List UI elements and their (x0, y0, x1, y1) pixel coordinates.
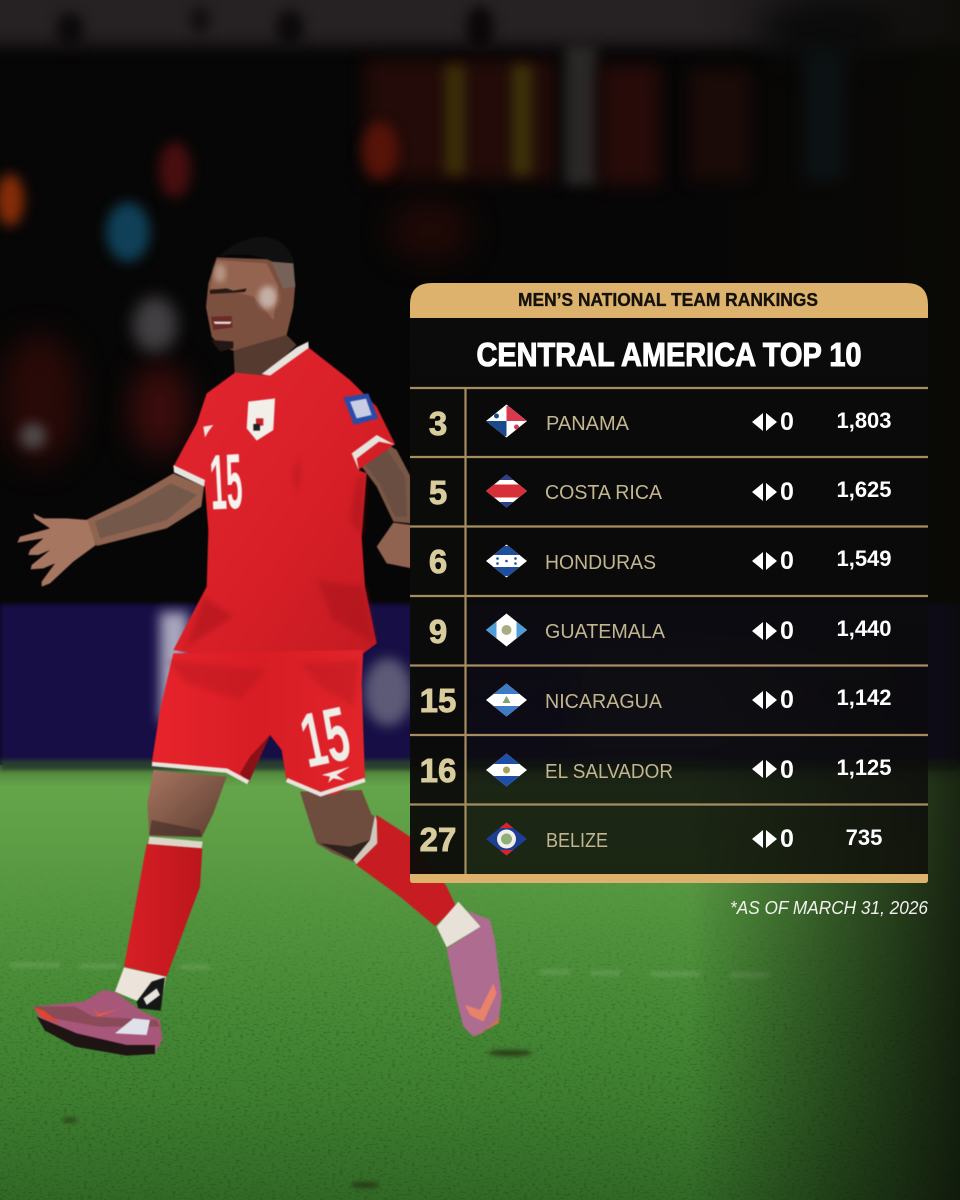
points: 1,440 (836, 616, 892, 641)
name: PANAMA (546, 413, 630, 435)
shorts number: 15 (294, 691, 357, 784)
rank 6: 6 (429, 543, 447, 580)
rank 16: 16 (420, 752, 456, 789)
row: Panama (429, 404, 891, 438)
flag: Guatemala (486, 613, 528, 647)
player: footballer in red kit (17, 237, 502, 1056)
panel: rankings table (410, 283, 928, 883)
row: El Salvador (421, 754, 891, 786)
icon: no change arrows (752, 622, 777, 640)
icon: no change arrows (752, 760, 777, 778)
table background (410, 317, 928, 875)
name: COSTA RICA (545, 482, 663, 504)
row: Guatemala (430, 614, 891, 646)
rank 5: 5 (429, 474, 447, 511)
row: Nicaragua (421, 684, 891, 716)
jersey folds (187, 453, 375, 647)
points: 1,549 (836, 546, 892, 571)
points: 1,125 (836, 755, 892, 780)
rank 9: 9 (429, 613, 447, 650)
upper body: 15 (208, 437, 244, 526)
flag: Nicaragua (486, 683, 528, 717)
change value: 0 (780, 617, 794, 645)
points: 1,142 (836, 685, 892, 710)
lower body (33, 650, 502, 1056)
flag: Honduras (486, 544, 528, 578)
footnote: date: *AS OF MARCH 31, 2026 (730, 898, 929, 918)
name: NICARAGUA (545, 691, 663, 713)
icon: no change arrows (752, 483, 777, 501)
header bar (410, 283, 928, 318)
title: CENTRAL AMERICA TOP 10 (476, 336, 862, 373)
name: GUATEMALA (545, 621, 666, 643)
name: HONDURAS (545, 552, 656, 574)
change value: 0 (780, 825, 794, 853)
change value: 0 (780, 478, 794, 506)
rank 3: 3 (429, 405, 447, 442)
change value: 0 (780, 686, 794, 714)
flag: Belize (486, 822, 528, 856)
icon: no change arrows (752, 691, 777, 709)
row: Belize (420, 822, 882, 856)
flag: El Salvador (486, 753, 528, 787)
change value: 0 (780, 756, 794, 784)
icon: no change arrows (752, 552, 777, 570)
icon: no change arrows (752, 413, 777, 431)
row: Honduras (430, 544, 891, 578)
rank 15: 15 (420, 682, 456, 719)
change value: 0 (780, 547, 794, 575)
icon: no change arrows (752, 830, 777, 848)
name: EL SALVADOR (545, 761, 673, 783)
header bar: MEN’S NATIONAL TEAM RANKINGS (518, 290, 818, 310)
points: 1,803 (836, 408, 892, 433)
rank 27: 27 (420, 821, 456, 858)
upper body (17, 237, 412, 667)
points: 735 (846, 825, 882, 850)
flag: Costa Rica (486, 474, 528, 508)
name: BELIZE (546, 830, 608, 852)
footer bar (410, 874, 928, 883)
row: Costa Rica (429, 474, 891, 508)
change value: 0 (780, 408, 794, 436)
flag: Panama (486, 404, 528, 438)
points: 1,625 (836, 477, 892, 502)
